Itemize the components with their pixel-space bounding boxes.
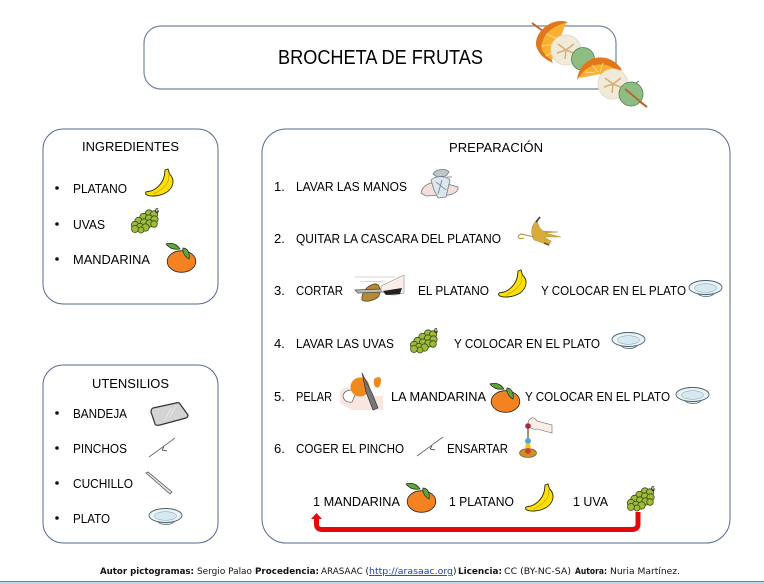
icon: grapes xyxy=(627,486,655,511)
item: cuchillo xyxy=(55,472,172,494)
step 1 xyxy=(274,170,458,198)
fruit order row: 1 PLATANO xyxy=(449,494,514,509)
step 5 xyxy=(274,373,709,412)
fruit order row xyxy=(313,483,655,512)
step 2: QUITAR LA CASCARA DEL PLATANO xyxy=(296,231,501,246)
step 5: PELAR xyxy=(296,389,332,404)
fruit order row: 1 MANDARINA xyxy=(313,494,400,509)
fruit order row: 1 UVA xyxy=(573,494,608,509)
icon: plate xyxy=(689,280,722,297)
footer credits: Autor pictogramas: xyxy=(100,567,194,577)
step 5: Y COLOCAR EN EL PLATO xyxy=(525,389,670,404)
footer credits: http://arasaac.org xyxy=(369,567,453,577)
step 3: 3. xyxy=(274,283,285,298)
item: platano xyxy=(55,169,173,196)
footer credits: CC (BY-NC-SA) xyxy=(504,567,571,577)
footer credits: ARASAAC ( xyxy=(321,567,369,577)
icon: orange xyxy=(490,383,520,412)
heading: utensilios: UTENSILIOS xyxy=(92,376,169,391)
step 3: CORTAR xyxy=(296,283,343,298)
step 5: LA MANDARINA xyxy=(391,389,486,404)
icon: cutting xyxy=(355,275,404,301)
item: pinchos xyxy=(55,438,175,457)
step 1: 1. xyxy=(274,179,285,194)
step 4: LAVAR LAS UVAS xyxy=(296,336,394,351)
icon: washing hands xyxy=(421,170,458,198)
arrow: red return arrow xyxy=(311,512,638,530)
item: bandeja: BANDEJA xyxy=(73,406,127,421)
item: pinchos: PINCHOS xyxy=(73,441,127,456)
icon: peeling mandarin xyxy=(340,373,383,410)
footer credits: Licencia: xyxy=(458,567,502,577)
step 4: Y COLOCAR EN EL PLATO xyxy=(454,336,600,351)
heading: ingredientes: INGREDIENTES xyxy=(82,139,179,154)
icon: orange xyxy=(406,483,436,512)
step 5: 5. xyxy=(274,389,285,404)
step 2 xyxy=(274,217,561,246)
footer credits: Autora: xyxy=(575,567,607,577)
footer credits: Nuria Martínez. xyxy=(610,567,680,577)
panel: preparacion xyxy=(262,129,730,543)
step 4 xyxy=(274,328,645,353)
icon: plate xyxy=(676,388,709,404)
icon: banana xyxy=(526,484,553,511)
step 6 xyxy=(274,418,552,458)
item: bandeja xyxy=(55,403,188,425)
footer credits xyxy=(100,567,680,577)
icon: grapes xyxy=(410,328,438,353)
step 6: COGER EL PINCHO xyxy=(296,441,404,456)
footer credits: Sergio Palao xyxy=(197,567,252,577)
icon: threading fruit xyxy=(520,418,552,458)
item: mandarina: MANDARINA xyxy=(73,252,150,267)
title: BROCHETA DE FRUTAS xyxy=(278,47,483,69)
icon: banana xyxy=(499,270,526,297)
step 3 xyxy=(274,270,722,301)
icon: skewer xyxy=(417,437,443,456)
step 4: 4. xyxy=(274,336,285,351)
heading: preparacion: PREPARACIÓN xyxy=(449,140,543,155)
step 6: ENSARTAR xyxy=(447,441,508,456)
step 3: EL PLATANO xyxy=(418,283,489,298)
item: plato: PLATO xyxy=(73,511,110,526)
step 2: 2. xyxy=(274,231,285,246)
panel: utensilios xyxy=(43,365,218,543)
icon: plate xyxy=(612,332,645,349)
item: cuchillo: CUCHILLO xyxy=(73,476,133,491)
step 6: 6. xyxy=(274,441,285,456)
footer credits: ) xyxy=(453,567,457,577)
step 3: Y COLOCAR EN EL PLATO xyxy=(541,283,686,298)
panel: ingredientes xyxy=(43,129,218,304)
item: uvas xyxy=(55,208,159,233)
item: platano: PLATANO xyxy=(73,181,127,196)
footer credits: Procedencia: xyxy=(255,567,319,577)
icon: banana peel xyxy=(518,217,561,245)
step 1: LAVAR LAS MANOS xyxy=(296,179,407,194)
item: uvas: UVAS xyxy=(73,217,105,232)
item: plato xyxy=(55,508,182,526)
title box xyxy=(144,26,616,89)
icon: fruit skewer xyxy=(532,21,647,107)
item: mandarina xyxy=(55,243,196,272)
